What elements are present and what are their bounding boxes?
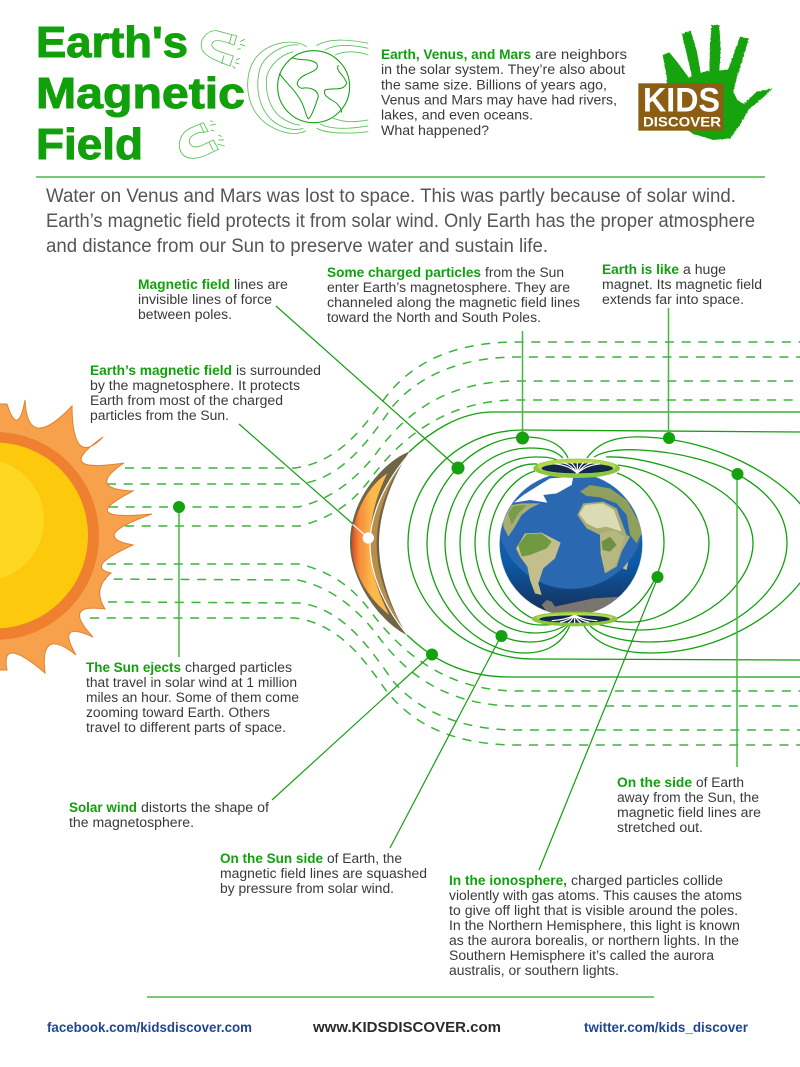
intro statement: Water on Venus and Mars was lost to space. This was partly because of solar wind.	[46, 186, 736, 207]
text: away side: of Earth	[696, 775, 744, 790]
text: on the sun side: by pressure from solar wind.	[220, 881, 394, 896]
text: ionosphere: In the Northern Hemisphere, this light is known	[449, 918, 740, 933]
intro paragraph top: lakes, and even oceans.	[381, 107, 533, 123]
text: magnetosphere: is surrounded	[236, 363, 321, 378]
solar wind dashed lines	[90, 342, 800, 745]
aurora north	[533, 459, 620, 478]
icon: lower magnet	[179, 121, 225, 158]
text: ionosphere	[449, 873, 742, 978]
intro paragraph top: the same size. Billions of years ago,	[381, 76, 607, 92]
text: earth is like a magnet: extends far into space.	[602, 292, 744, 307]
text: magnetic field lines: invisible lines of force	[138, 292, 272, 307]
footer links: twitter.com/kids_discover	[584, 1020, 749, 1035]
footer links	[47, 1019, 749, 1036]
text: charged particles: from the Sun	[485, 265, 564, 280]
text: earth is like a magnet: Earth is like	[602, 262, 679, 277]
text: solar wind: the magnetosphere.	[69, 815, 194, 830]
text: the sun ejects: travel to different parts of space.	[86, 720, 286, 735]
aurora south	[532, 612, 618, 626]
text: charged particles: channeled along the magnetic field lines	[327, 295, 580, 310]
earth globe	[499, 476, 643, 613]
text: the sun ejects: that travel in solar wind at 1 million	[86, 675, 297, 690]
leader lines	[179, 306, 737, 870]
text: magnetic field lines: Magnetic field	[138, 277, 230, 292]
text: earth is like a magnet: a huge	[683, 262, 726, 277]
text: the sun ejects: zooming toward Earth. Others	[86, 705, 270, 720]
text: magnetosphere: particles from the Sun.	[90, 408, 229, 423]
text: charged particles: toward the North and South Poles.	[327, 310, 541, 325]
text: magnetosphere: Earth’s magnetic field	[90, 363, 232, 378]
magnetic field solid lines	[407, 412, 800, 677]
text: magnetosphere: by the magnetosphere. It protects	[90, 378, 300, 393]
text: solar wind: distorts the shape of	[141, 800, 269, 815]
text: solar wind: Solar wind	[69, 800, 137, 815]
text: magnetic field lines: between poles.	[138, 307, 232, 322]
intro paragraph top: Venus and Mars may have had rivers,	[381, 92, 617, 108]
text: magnetic field lines: lines are	[234, 277, 288, 292]
intro paragraph top: are neighbors	[535, 46, 627, 62]
text: on the sun side	[220, 851, 427, 896]
sun	[0, 400, 152, 673]
intro paragraph top	[381, 46, 627, 138]
footer links: facebook.com/kidsdiscover.com	[47, 1020, 252, 1035]
intro paragraph top: in the solar system. They’re also about	[381, 61, 625, 77]
text: away side: stretched out.	[617, 820, 703, 835]
intro paragraph top: What happened?	[381, 122, 489, 138]
text: magnetosphere	[90, 363, 321, 423]
text: ionosphere: Southern Hemisphere it’s called the aurora	[449, 948, 714, 963]
text: the sun ejects: charged particles	[185, 660, 292, 675]
text: charged particles: Some charged particles	[327, 265, 481, 280]
title: Magnetic	[36, 69, 245, 118]
text: on the sun side: magnetic field lines are squashed	[220, 866, 427, 881]
text: solar wind	[69, 800, 269, 830]
text: ionosphere: australis, or southern lights.	[449, 963, 619, 978]
bow shock magnetopause	[350, 452, 409, 635]
intro statement: and distance from our Sun to preserve water and sustain life.	[46, 236, 548, 257]
text: the sun ejects: The Sun ejects	[86, 660, 181, 675]
footer links: www.KIDSDISCOVER.com	[312, 1019, 501, 1036]
callout dots	[173, 432, 744, 660]
intro statement: Earth’s magnetic field protects it from solar wind. Only Earth has the proper atmosphere	[46, 211, 755, 232]
text: away side: magnetic field lines are	[617, 805, 761, 820]
text: ionosphere: as the aurora borealis, or northern lights. In the	[449, 933, 739, 948]
icon: globe with field lines	[248, 40, 368, 133]
text: away side: away from the Sun, the	[617, 790, 759, 805]
text: magnetic field lines	[138, 277, 288, 322]
title: Earth's	[36, 18, 188, 67]
title	[36, 18, 245, 169]
text: on the sun side: On the Sun side	[220, 851, 323, 866]
title: Field	[36, 120, 143, 169]
intro paragraph top: Earth, Venus, and Mars	[381, 46, 531, 62]
logo: Kids Discover hand: KIDS	[643, 82, 720, 120]
text: magnetosphere: Earth from most of the charged	[90, 393, 283, 408]
text: charged particles: enter Earth’s magnetosphere. They are	[327, 280, 570, 295]
text: ionosphere: charged particles collide	[571, 873, 723, 888]
intro statement	[46, 186, 755, 257]
text: away side	[617, 775, 761, 835]
text: ionosphere: violently with gas atoms. This causes the atoms	[449, 888, 742, 903]
logo: Kids Discover hand	[638, 25, 773, 140]
text: away side: On the side	[617, 775, 692, 790]
icon: upper magnet	[201, 31, 245, 69]
text: earth is like a magnet	[602, 262, 762, 307]
text: on the sun side: of Earth, the	[327, 851, 402, 866]
text: charged particles	[327, 265, 580, 325]
logo: Kids Discover hand: DISCOVER	[643, 114, 721, 130]
text: ionosphere: In the ionosphere,	[449, 873, 567, 888]
text: the sun ejects: miles an hour. Some of them come	[86, 690, 299, 705]
text: ionosphere: to give off light that is visible around the poles.	[449, 903, 738, 918]
text: earth is like a magnet: magnet. Its magnetic field	[602, 277, 762, 292]
text: the sun ejects	[86, 660, 299, 735]
